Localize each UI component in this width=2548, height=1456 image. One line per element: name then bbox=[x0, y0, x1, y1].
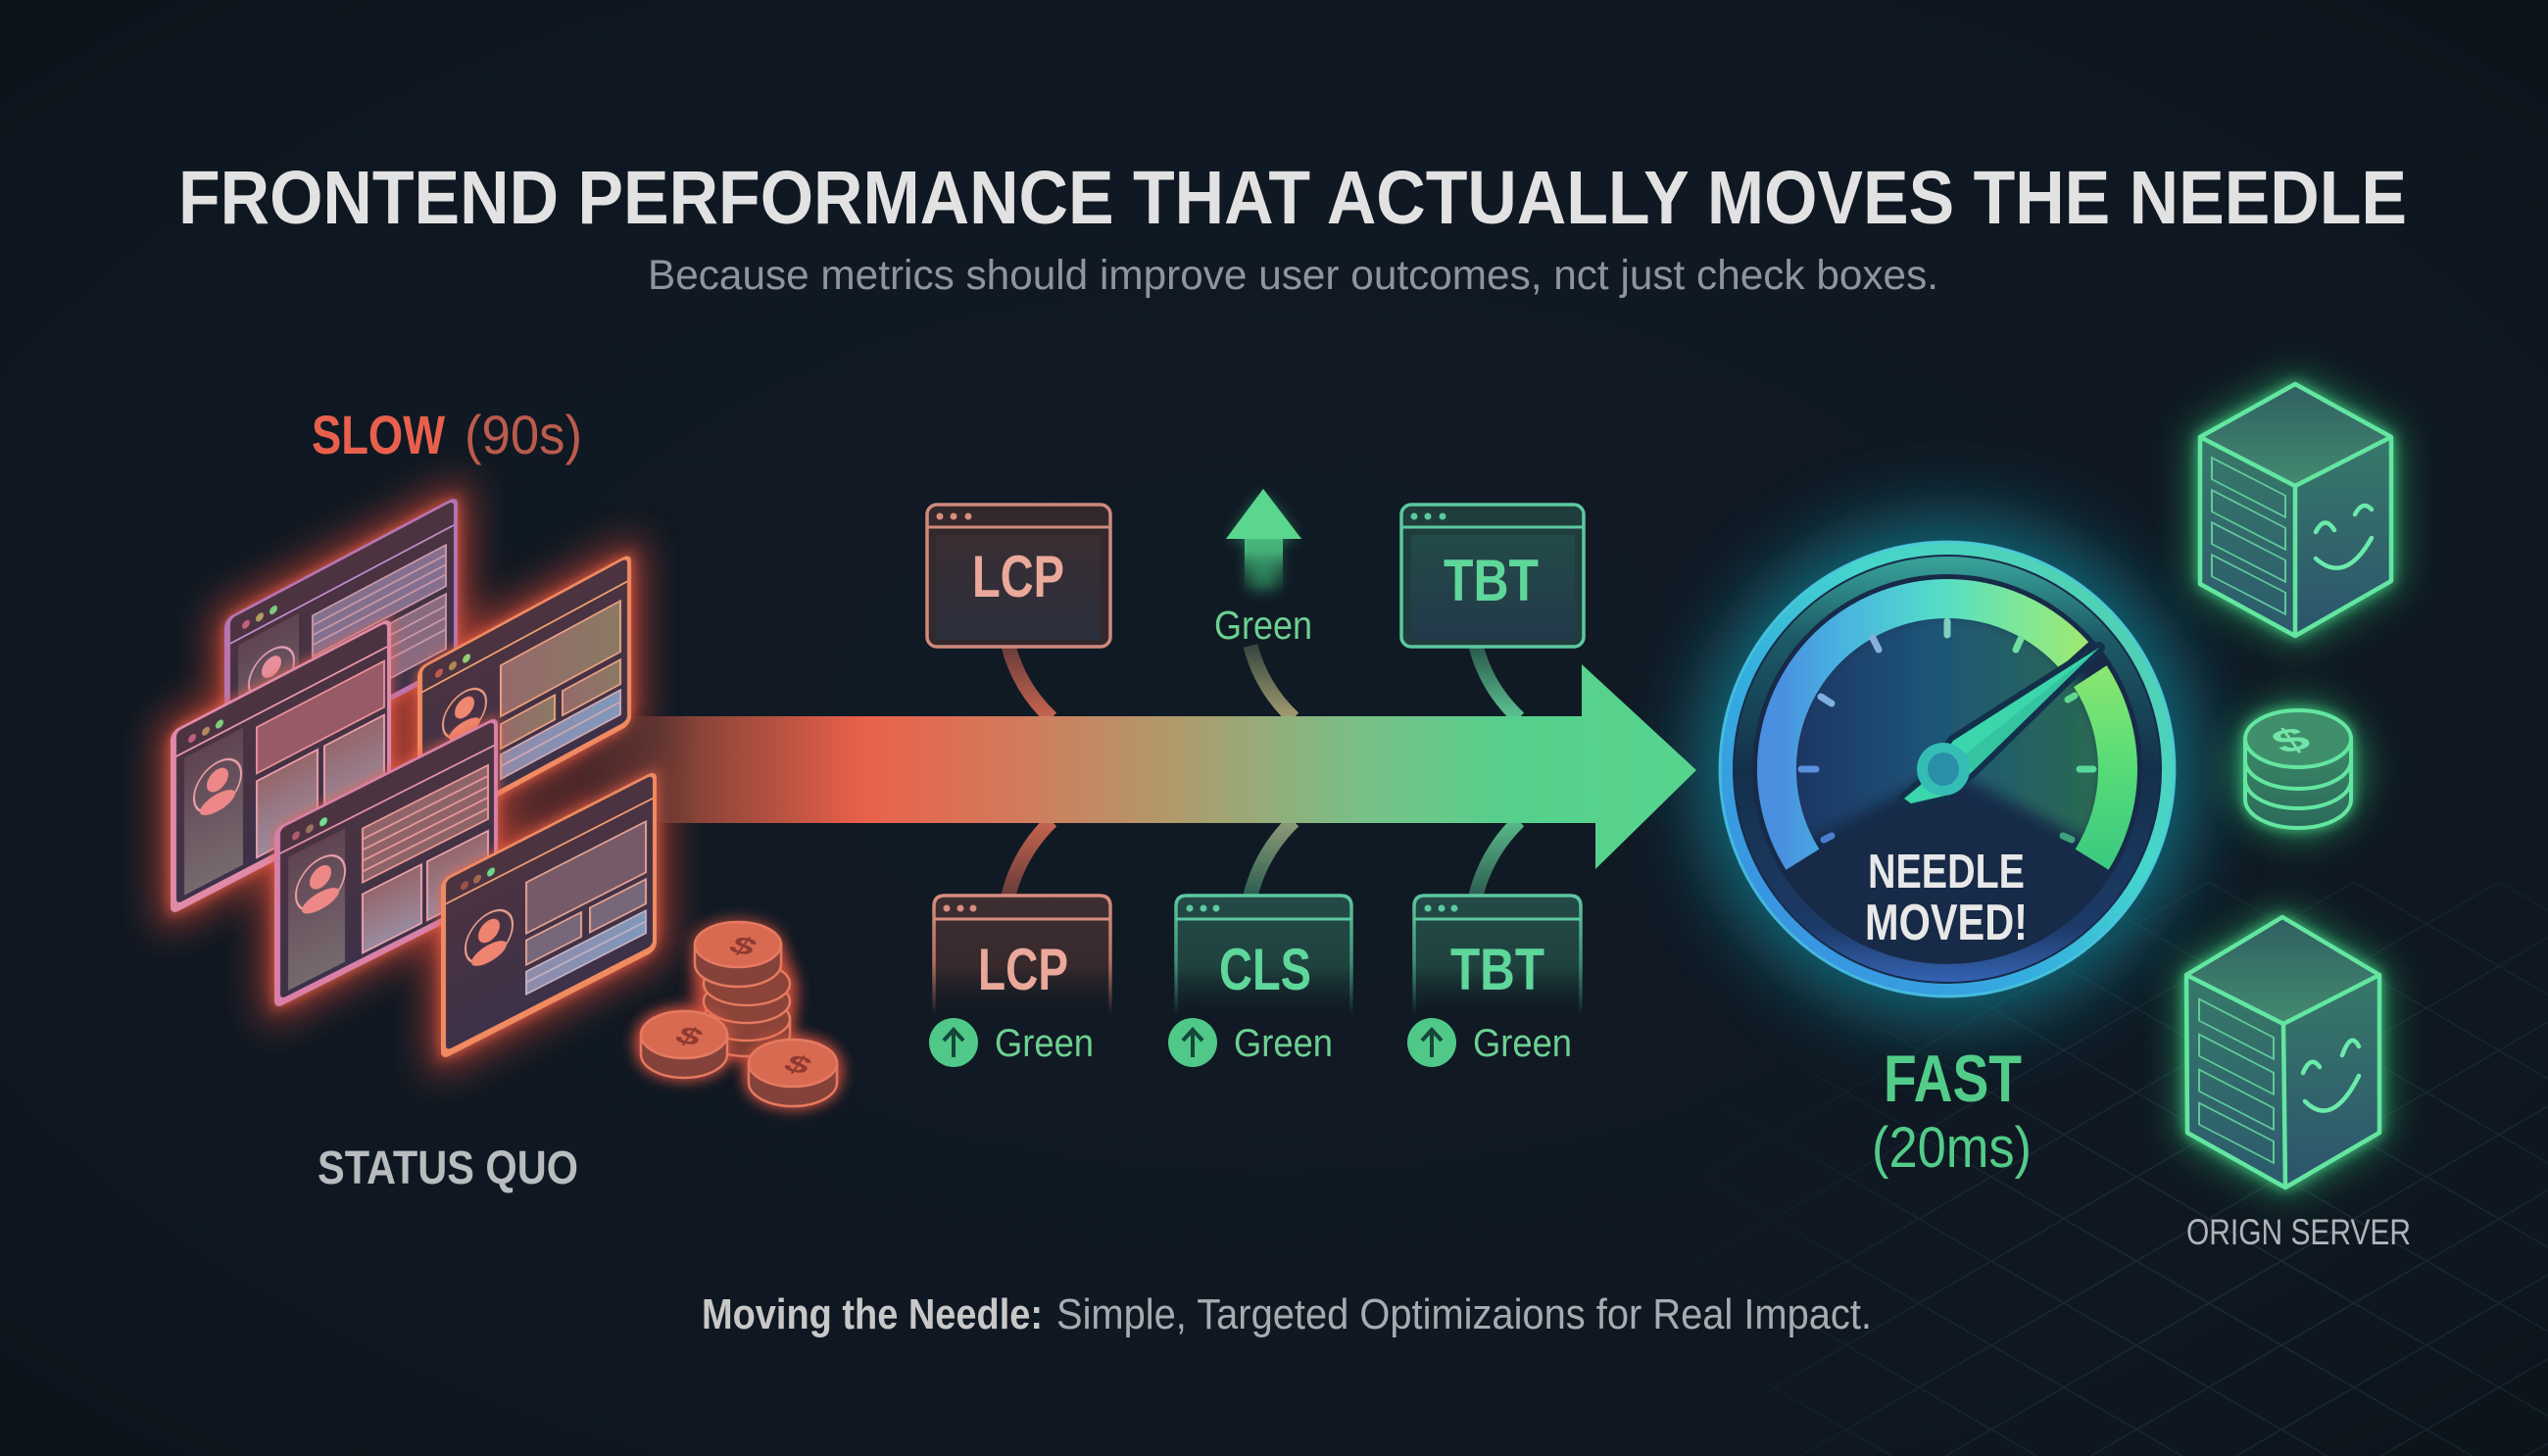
gauge text bbox=[1865, 846, 2028, 951]
metric box: CLS bottom: CLS bbox=[1219, 937, 1311, 1002]
window: middle pink bbox=[274, 716, 498, 1009]
rack slots bbox=[2199, 999, 2274, 1163]
green badge: LCP bbox=[929, 1018, 1094, 1067]
metric box: LCP top: LCP bbox=[972, 544, 1064, 609]
server bottom bbox=[2186, 917, 2379, 1188]
connectors bbox=[1008, 646, 1519, 896]
server top bbox=[2200, 384, 2391, 636]
red glow behind windows bbox=[171, 496, 657, 1060]
green badge: TBT: Green bbox=[1473, 1022, 1572, 1065]
subtitle: Because metrics should improve user outcomes, nct just check boxes. bbox=[648, 252, 1938, 299]
slow label: SLOW bbox=[312, 404, 445, 465]
green up arrow bbox=[1226, 489, 1301, 593]
right coin dollar sign: $ bbox=[778, 1049, 818, 1080]
window: back purple bbox=[224, 496, 458, 789]
window: left pink bbox=[171, 617, 391, 915]
metric box: LCP bottom bbox=[934, 896, 1110, 1015]
gauge text: NEEDLE bbox=[1868, 846, 2025, 898]
server glows bbox=[2186, 384, 2391, 1188]
metric box: LCP top bbox=[927, 505, 1110, 647]
status quo label: STATUS QUO bbox=[318, 1142, 578, 1194]
metric box: TBT top: TBT bbox=[1444, 548, 1539, 613]
footer caption bbox=[702, 1290, 1872, 1338]
metric box: LCP bottom: LCP bbox=[978, 937, 1068, 1002]
metric box: TBT bottom: TBT bbox=[1450, 937, 1544, 1002]
gauge inner band bbox=[1743, 565, 2151, 973]
speedometer gauge bbox=[1720, 542, 2175, 996]
red coins bbox=[635, 922, 842, 1106]
gauge needle bbox=[1904, 648, 2099, 803]
slow label bbox=[312, 404, 582, 465]
origin server label: ORIGN SERVER bbox=[2186, 1212, 2411, 1252]
fast label: FAST bbox=[1884, 1042, 2022, 1116]
green badge: TBT bbox=[1407, 1018, 1572, 1067]
gauge colour arc bbox=[1777, 599, 2118, 859]
stacked browser windows bbox=[171, 496, 657, 1060]
gauge glow bbox=[1696, 518, 2198, 1020]
coin stack green bbox=[2245, 710, 2351, 828]
fast value: (20ms) bbox=[1872, 1116, 2032, 1180]
left coin bbox=[641, 1011, 727, 1078]
green label: Green bbox=[1214, 603, 1312, 648]
gauge outer ring bbox=[1726, 548, 2169, 991]
smiley face bbox=[2303, 1041, 2359, 1111]
footer caption: Simple, Targeted Optimizaions for Real Impact. bbox=[1056, 1290, 1872, 1338]
gauge ticks bbox=[1801, 621, 2093, 840]
slow label: (90s) bbox=[465, 404, 582, 465]
green badge: CLS: Green bbox=[1234, 1022, 1333, 1065]
main gradient arrow bbox=[588, 664, 1696, 869]
footer caption: Moving the Needle: bbox=[702, 1290, 1043, 1338]
gauge text: MOVED! bbox=[1865, 895, 2028, 951]
green badge: LCP: Green bbox=[995, 1022, 1094, 1065]
smiley face bbox=[2316, 506, 2372, 568]
right coin bbox=[749, 1040, 837, 1106]
rack slots bbox=[2212, 458, 2285, 614]
coin dollar sign: $ bbox=[723, 931, 763, 961]
gauge inner face bbox=[1789, 612, 2105, 841]
coin dollar sign: $ bbox=[2263, 720, 2319, 761]
left coin dollar sign: $ bbox=[669, 1021, 710, 1051]
window: front orange bbox=[441, 770, 657, 1060]
metric box: TBT top bbox=[1401, 505, 1584, 647]
metric box: CLS bottom bbox=[1176, 896, 1351, 1015]
background grid bbox=[1838, 882, 2548, 1456]
coin stack bbox=[695, 922, 790, 1056]
green badge: CLS bbox=[1168, 1018, 1333, 1067]
gauge dial base bbox=[1732, 554, 2163, 985]
window: right orange bbox=[417, 553, 631, 840]
metric box: TBT bottom bbox=[1414, 896, 1581, 1015]
